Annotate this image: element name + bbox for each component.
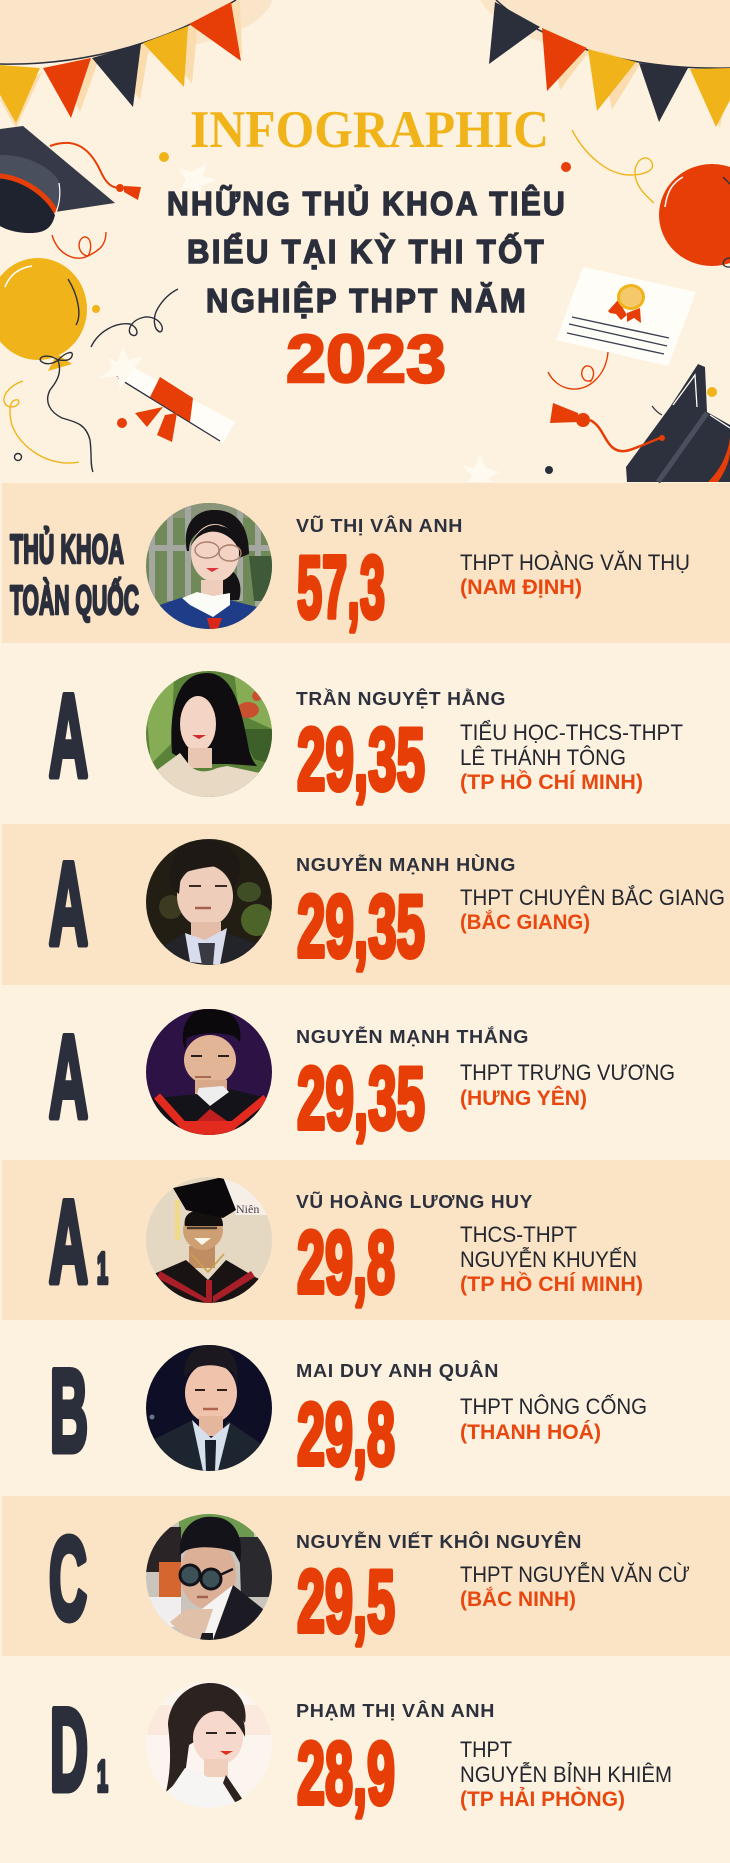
score: 29,35 xyxy=(297,710,425,808)
school xyxy=(460,720,683,794)
school xyxy=(460,1222,643,1296)
panel: khối A1 Vũ Hoàng Lương Huy xyxy=(2,1160,730,1320)
school: (TP HẢI PHÒNG) xyxy=(460,1787,625,1811)
icon: graduation cap right xyxy=(550,364,730,482)
portrait caption: banner text: Niên xyxy=(236,1202,259,1216)
school: NGUYỄN KHUYẾN xyxy=(460,1246,637,1272)
heading: title lines: BIỂU TẠI KỲ THI TỐT xyxy=(187,232,546,270)
school xyxy=(460,1060,675,1110)
panel: khối C Nguyễn Viết Khôi Nguyên xyxy=(2,1496,730,1656)
name: NGUYỄN MẠNH HÙNG xyxy=(296,854,516,875)
label: category xyxy=(10,526,139,623)
panel: khối B Mai Duy Anh Quân xyxy=(50,1345,647,1484)
portrait: Vũ Thị Vân Anh xyxy=(146,503,272,629)
panel: khối C Nguyễn Viết Khôi Nguyên: C xyxy=(49,1513,87,1644)
icon: red balloon xyxy=(659,164,730,267)
letter: A xyxy=(49,1176,88,1307)
heading: title lines: NHỮNG THỦ KHOA TIÊU xyxy=(167,185,567,222)
school: (THANH HOÁ) xyxy=(460,1421,601,1444)
school: LÊ THÁNH TÔNG xyxy=(460,745,626,770)
panel: khối A Trần Nguyệt Hằng: A xyxy=(49,670,88,801)
school: THPT NGUYỄN VĂN CỪ xyxy=(460,1561,690,1587)
panel: khối A Nguyễn Mạnh Hùng: A xyxy=(49,838,88,969)
icon: diploma certificate xyxy=(556,267,696,366)
panel: khối A1 Vũ Hoàng Lương Huy: 1 xyxy=(97,1244,108,1293)
label: category: TOÀN QUỐC xyxy=(10,577,139,623)
title: infographic: INFOGRAPHIC xyxy=(190,101,549,159)
icon: yellow balloon xyxy=(0,258,93,472)
name: VŨ THỊ VÂN ANH xyxy=(296,515,463,536)
heading: title lines xyxy=(167,185,567,319)
score: 29,35 xyxy=(297,876,425,976)
bunting: top left xyxy=(0,0,272,128)
icon: rolled scroll xyxy=(114,362,235,443)
school: (BẮC NINH) xyxy=(460,1587,576,1611)
school: TIỂU HỌC-THCS-THPT xyxy=(460,720,683,745)
school xyxy=(460,1561,690,1611)
label: category: THỦ KHOA xyxy=(10,526,124,572)
decorative confetti dots xyxy=(14,152,717,474)
school: (BẮC GIANG) xyxy=(460,910,590,934)
bunting: top right xyxy=(480,0,730,128)
portrait: Trần Nguyệt Hằng xyxy=(146,671,272,797)
panel: khối D1 Phạm Thị Vân Anh xyxy=(50,1682,672,1822)
score: 29,35 xyxy=(297,1048,425,1148)
portrait: Nguyễn Mạnh Thắng xyxy=(146,1008,272,1137)
portrait: Mai Duy Anh Quân xyxy=(146,1345,272,1471)
score: 29,5 xyxy=(297,1552,395,1650)
panel: thủ khoa toàn quốc xyxy=(2,483,730,643)
school xyxy=(460,550,690,599)
school: NGUYỄN BỈNH KHIÊM xyxy=(460,1761,672,1787)
portrait: Phạm Thị Vân Anh xyxy=(146,1682,272,1808)
school: THPT xyxy=(460,1737,512,1762)
decorative sparkle stars xyxy=(100,163,500,482)
name: MAI DUY ANH QUÂN xyxy=(296,1360,499,1381)
portrait: Nguyễn Viết Khôi Nguyên xyxy=(146,1514,272,1640)
decorative swirls xyxy=(4,130,654,463)
name: NGUYỄN VIẾT KHÔI NGUYÊN xyxy=(296,1531,582,1552)
heading: year 2023: 2023 xyxy=(286,321,446,397)
letter xyxy=(49,1176,108,1307)
portrait: Nguyễn Mạnh Hùng xyxy=(146,839,273,965)
school xyxy=(460,885,725,934)
school: (TP HỒ CHÍ MINH) xyxy=(460,1272,643,1296)
name: PHẠM THỊ VÂN ANH xyxy=(296,1700,495,1721)
school: THPT NÔNG CỐNG xyxy=(460,1393,647,1419)
panel: khối A Nguyễn Mạnh Thắng: A xyxy=(49,1011,88,1142)
score: 29,8 xyxy=(297,1384,395,1484)
letter: D xyxy=(50,1684,88,1815)
panel: khối A Nguyễn Mạnh Hùng xyxy=(2,824,730,985)
panel: khối D1 Phạm Thị Vân Anh: 1 xyxy=(97,1752,108,1801)
school: THPT TRƯNG VƯƠNG xyxy=(460,1060,675,1085)
school: (HƯNG YÊN) xyxy=(460,1086,587,1110)
name: VŨ HOÀNG LƯƠNG HUY xyxy=(296,1191,533,1212)
panel: khối A Trần Nguyệt Hằng xyxy=(49,670,683,808)
panel: khối B Mai Duy Anh Quân: B xyxy=(50,1345,88,1476)
name: NGUYỄN MẠNH THẮNG xyxy=(296,1026,529,1047)
school xyxy=(460,1737,672,1811)
school: (TP HỒ CHÍ MINH) xyxy=(460,770,643,794)
school: (NAM ĐỊNH) xyxy=(460,576,582,599)
icon: graduation cap left xyxy=(0,126,141,233)
score: 28,9 xyxy=(297,1724,395,1822)
school: THPT HOÀNG VĂN THỤ xyxy=(460,550,690,575)
panel: khối A Nguyễn Mạnh Thắng xyxy=(49,1008,675,1148)
school: THCS-THPT xyxy=(460,1222,577,1247)
heading: title lines: NGHIỆP THPT NĂM xyxy=(206,282,528,319)
panel: hero header xyxy=(0,0,730,482)
score: 29,8 xyxy=(297,1212,395,1312)
portrait: Vũ Hoàng Lương Huy xyxy=(146,1177,272,1303)
school xyxy=(460,1393,647,1444)
score: 57,3 xyxy=(297,538,385,636)
name: TRẦN NGUYỆT HẰNG xyxy=(296,688,506,709)
letter xyxy=(50,1684,108,1815)
